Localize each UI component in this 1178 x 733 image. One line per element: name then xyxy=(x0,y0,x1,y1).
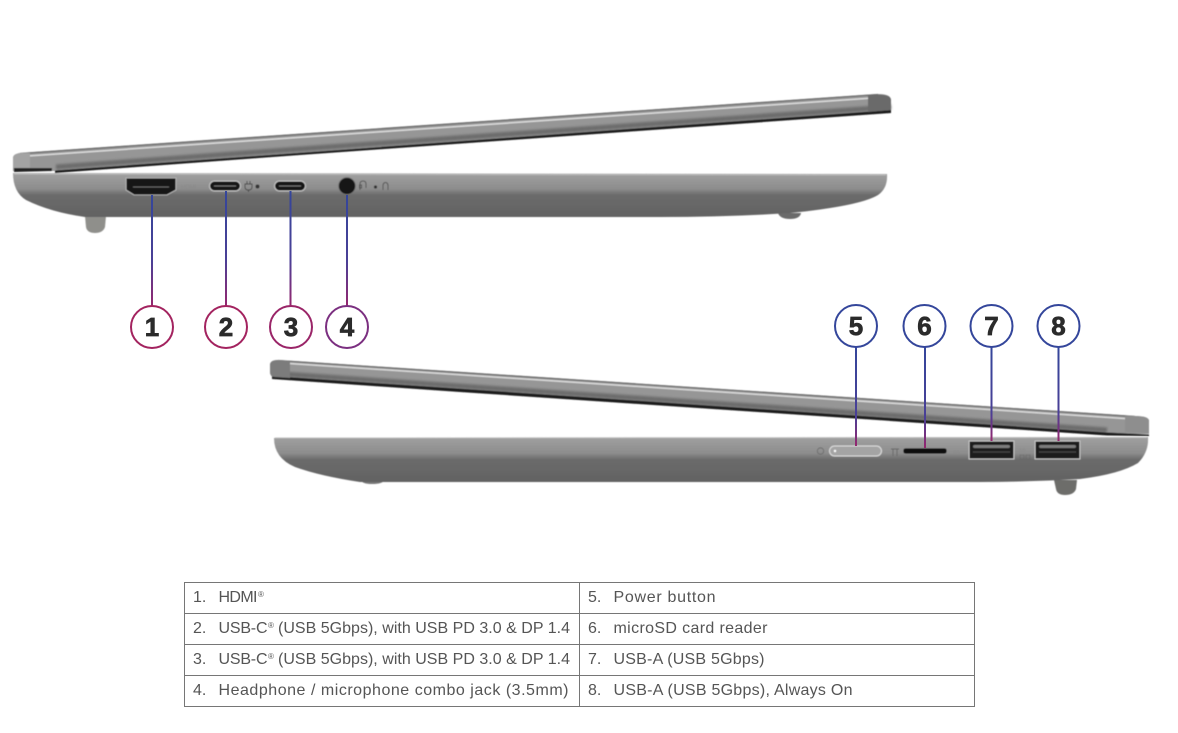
callout 6 xyxy=(904,305,946,347)
legend item 1: HDMI xyxy=(218,589,258,606)
port: audio jack xyxy=(338,178,356,194)
callout 4 xyxy=(326,306,368,348)
port: HDMI xyxy=(126,178,176,195)
legend item 5: 5. xyxy=(588,589,601,606)
callout 8: 8 xyxy=(1051,311,1066,341)
legend item 2: USB-C xyxy=(218,620,268,637)
callout 1 xyxy=(131,306,173,348)
legend item 4: Headphone / microphone combo jack (3.5mm) xyxy=(218,682,568,699)
legend item 4: 4. xyxy=(193,682,206,699)
callout 7: 7 xyxy=(984,311,999,341)
port: USB-C 3 xyxy=(274,181,306,191)
callout 5 xyxy=(835,305,877,347)
callout 3: 3 xyxy=(284,312,298,342)
callout 7 xyxy=(970,305,1012,347)
callout 5: 5 xyxy=(849,311,863,341)
callout 2 xyxy=(205,306,247,348)
port: microSD xyxy=(891,449,899,456)
callout 8 xyxy=(1038,305,1080,347)
lid xyxy=(13,94,891,171)
laptop: left side view xyxy=(13,94,891,233)
callout 2: 2 xyxy=(219,312,233,342)
laptop: right side view: SS xyxy=(1019,448,1026,454)
callout lines: ports 1 to 4 xyxy=(151,191,348,306)
laptop: right side view: SS xyxy=(953,450,960,456)
callout 6: 6 xyxy=(917,311,932,341)
base xyxy=(13,173,887,217)
legend item 6: microSD card reader xyxy=(614,620,768,637)
lid xyxy=(270,360,1149,434)
legend item 7: 7. xyxy=(588,651,601,668)
callout 1: 1 xyxy=(145,312,159,342)
laptop: right side view xyxy=(270,360,1149,495)
legend item 3: USB-C xyxy=(218,651,268,668)
legend item 8: USB-A (USB 5Gbps), Always On xyxy=(614,682,852,699)
port: USB-A 7 xyxy=(969,441,1014,459)
legend item 3: ® xyxy=(268,652,274,661)
legend item 1: 1. xyxy=(193,589,206,606)
port: USB-C 2 xyxy=(210,181,240,191)
legend item 2: 2. xyxy=(193,620,206,637)
legend item 8: 8. xyxy=(588,682,601,699)
port legend table xyxy=(184,582,974,706)
legend item 2: ® xyxy=(268,621,274,630)
port: USB-A 8 xyxy=(1035,441,1080,459)
laptop: left side view: HDMI xyxy=(181,185,197,191)
callout 3 xyxy=(270,306,312,348)
legend item 1: ® xyxy=(258,590,264,599)
port: power button xyxy=(817,448,824,454)
callout lines: ports 5 to 8 xyxy=(855,347,1060,448)
legend item 6: 6. xyxy=(588,620,601,637)
callout 4: 4 xyxy=(340,312,355,342)
legend item 2: (USB 5Gbps), with USB PD 3.0 & DP 1.4 xyxy=(278,620,570,637)
left foot xyxy=(361,480,384,484)
base xyxy=(274,437,1148,482)
legend item 5: Power button xyxy=(614,589,716,606)
legend item 7: USB-A (USB 5Gbps) xyxy=(614,651,764,668)
legend item 3: (USB 5Gbps), with USB PD 3.0 & DP 1.4 xyxy=(278,651,570,668)
left foot xyxy=(85,216,106,233)
legend item 1 xyxy=(193,589,264,606)
legend item 3: 3. xyxy=(193,651,206,668)
right foot xyxy=(778,213,801,219)
right foot xyxy=(1054,480,1077,495)
